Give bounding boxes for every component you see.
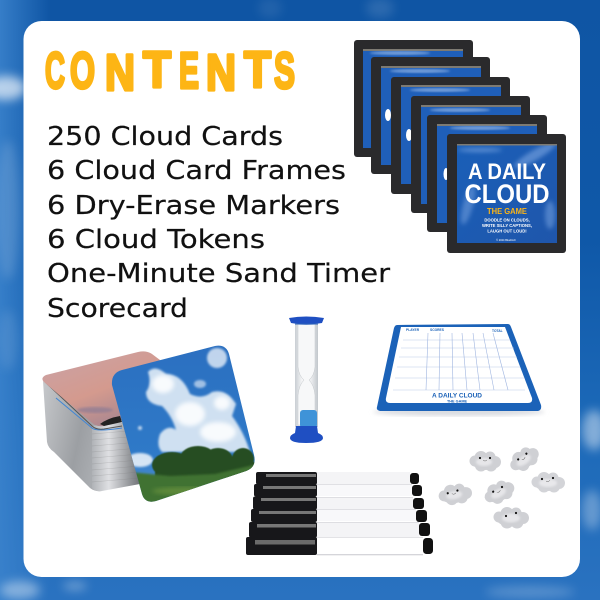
title: E bbox=[179, 42, 199, 99]
frame 1 bbox=[354, 40, 473, 157]
contents list: 6 Cloud Tokens bbox=[47, 225, 265, 255]
contents list: 6 Dry-Erase Markers bbox=[47, 191, 340, 221]
marker 5 bbox=[249, 522, 430, 538]
title: C bbox=[45, 42, 65, 99]
contents list: Scorecard bbox=[47, 294, 188, 324]
title: N bbox=[206, 44, 236, 101]
card tin with cloud cards bbox=[42, 346, 255, 502]
title: T bbox=[143, 41, 171, 98]
marker 4 bbox=[251, 509, 427, 522]
title: O bbox=[70, 42, 95, 99]
title: S bbox=[274, 42, 295, 99]
token 5 bbox=[437, 481, 474, 507]
tin body bbox=[43, 381, 102, 491]
frame 6: front card: DOODLE ON CLOUDS, bbox=[484, 218, 530, 222]
marker 3 bbox=[253, 496, 424, 510]
frame 2 bbox=[371, 57, 490, 174]
frame 6: front card: CLOUD bbox=[464, 179, 550, 209]
scorecard: TOTAL bbox=[492, 329, 503, 333]
marker 6 bbox=[246, 537, 433, 555]
scorecard: A DAILY CLOUD bbox=[432, 392, 482, 400]
contents list: 250 Cloud Cards bbox=[47, 122, 283, 152]
scorecard: SCORES bbox=[430, 328, 445, 332]
frame 6: front card: LAUGH OUT LOUD! bbox=[487, 228, 527, 234]
scorecard: PLAYER bbox=[406, 328, 420, 332]
frame 6: front card: THE GAME bbox=[487, 207, 528, 216]
scorecard: THE GAME bbox=[447, 400, 467, 404]
scorecard bbox=[373, 324, 545, 416]
contents list bbox=[47, 122, 391, 324]
frame 6: front card: © 2024 Bluefinch bbox=[496, 238, 516, 242]
frame 4 bbox=[411, 96, 530, 213]
contents list: One-Minute Sand Timer bbox=[47, 259, 391, 289]
token 3 bbox=[532, 472, 565, 492]
frame 5 bbox=[427, 115, 547, 232]
dry-erase markers bbox=[246, 472, 433, 555]
cloud photo card bbox=[112, 346, 255, 502]
frame 3 bbox=[391, 77, 510, 194]
token 6 bbox=[494, 507, 529, 528]
frame 6: front card bbox=[447, 134, 566, 253]
token 4 bbox=[481, 476, 518, 509]
frame 6: front card: A DAILY bbox=[468, 159, 546, 184]
pink sunset top card bbox=[42, 351, 160, 426]
contents list: 6 Cloud Card Frames bbox=[47, 156, 346, 186]
marker 1 bbox=[256, 472, 419, 484]
stack of card frames bbox=[354, 40, 566, 253]
sand timer bbox=[289, 316, 324, 443]
token 2 bbox=[506, 442, 543, 476]
token 1 bbox=[470, 451, 501, 472]
title bbox=[45, 41, 295, 101]
title: N bbox=[105, 44, 135, 101]
title: T bbox=[244, 41, 271, 98]
cloud tokens bbox=[437, 442, 565, 528]
marker 2 bbox=[254, 484, 422, 496]
frame 6: front card: WRITE SILLY CAPTIONS, bbox=[482, 223, 532, 228]
